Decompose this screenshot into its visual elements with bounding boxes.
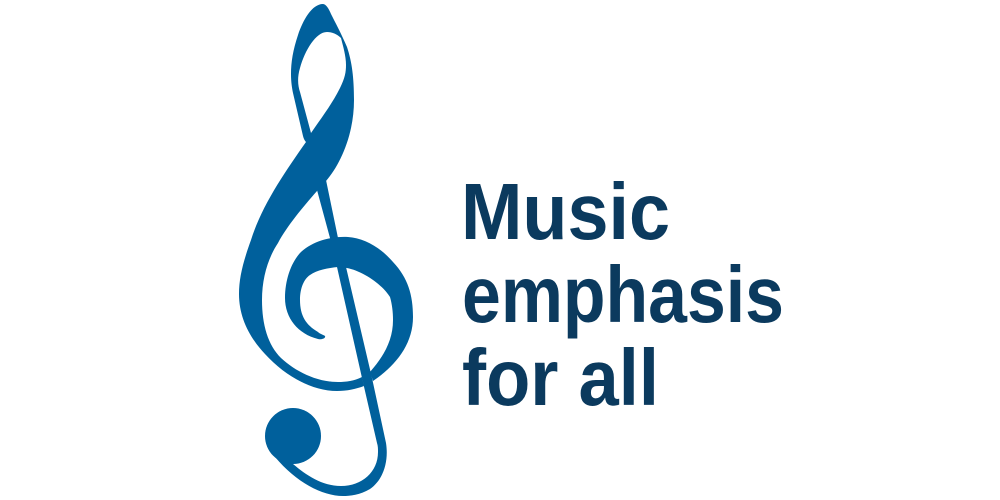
title: Music emphasis for all: Music (461, 167, 670, 256)
title: Music emphasis for all: emphasis (462, 250, 784, 339)
note head (265, 408, 321, 464)
title: Music emphasis for all (461, 167, 784, 422)
spiral bowl (285, 237, 413, 381)
icon: treble clef (239, 4, 413, 496)
title: Music emphasis for all: for all (462, 333, 659, 422)
stem (275, 180, 387, 496)
